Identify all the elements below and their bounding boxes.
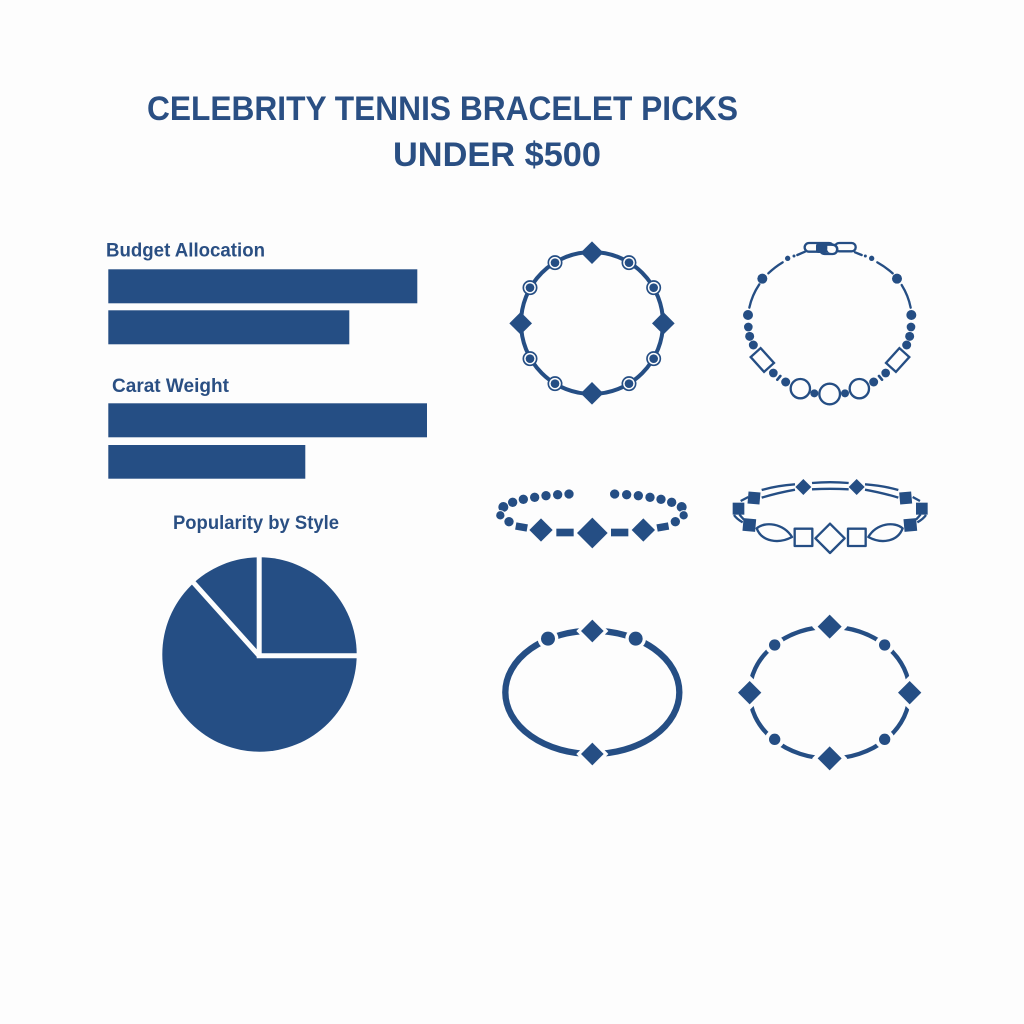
bar: carat top [108,403,427,437]
bracelet 3: oval beaded strand with diamonds [496,489,688,548]
bracelet 5: solid oval with diamonds and round stones [505,620,679,765]
bracelet 6: thin oval with four diamonds and four dots [738,615,921,770]
title: CELEBRITY TENNIS BRACELET PICKS [147,90,738,128]
heading: budget allocation: Budget Allocation [106,240,265,262]
bracelet 1: round with diamonds and bezel stones [509,241,675,405]
panel: popularity pie chart [162,513,360,752]
bar: carat bottom [108,445,305,479]
bracelet 2: clasp with mixed stones [743,243,916,404]
bar: budget bottom [108,310,349,344]
pie chart [162,552,360,752]
bar: budget top [108,269,417,303]
heading: carat weight: Carat Weight [112,376,230,397]
heading: popularity by style: Popularity by Style [173,513,339,534]
title [147,90,738,174]
panel: carat weight bars [108,376,427,479]
bracelet 4: oval double-line with outlined stones [733,479,928,553]
title: UNDER $500 [393,136,601,174]
panel: budget allocation bars [106,240,417,344]
